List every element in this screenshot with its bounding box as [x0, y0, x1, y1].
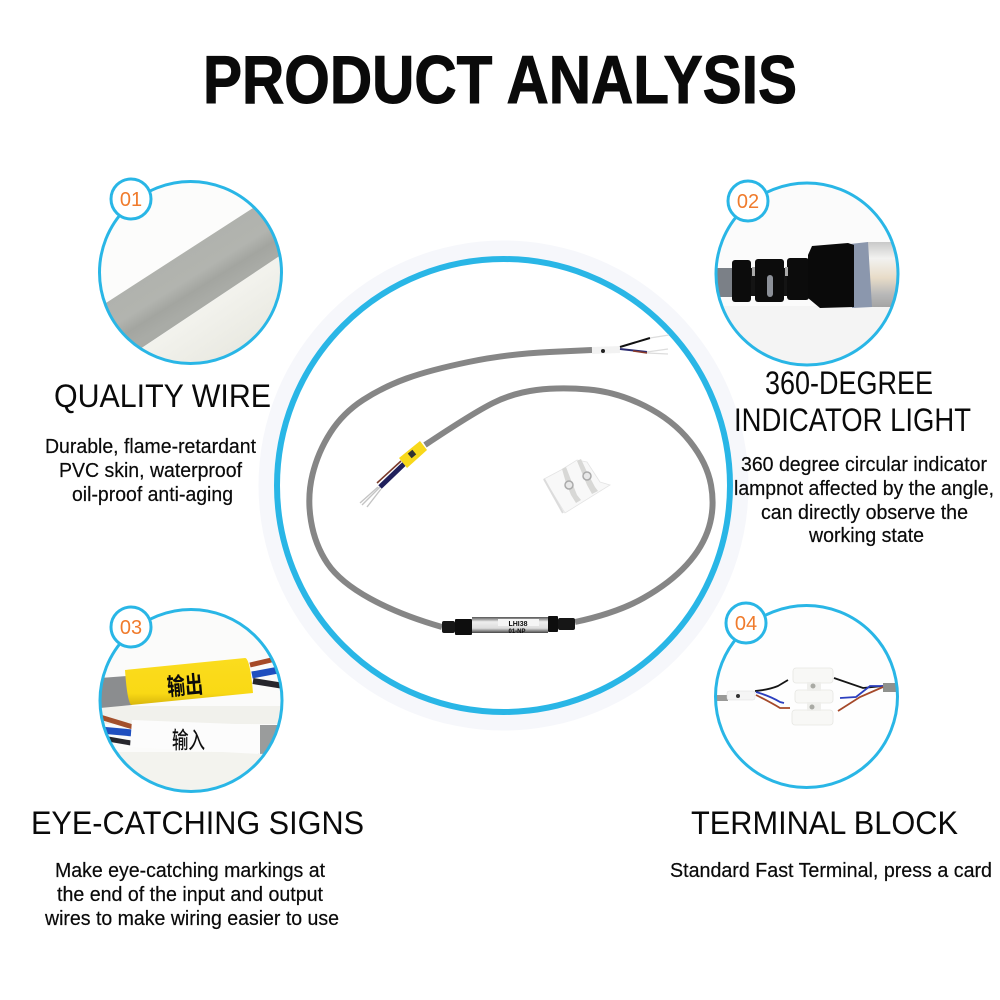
circle outline [716, 606, 898, 788]
heading: indicator light: 360-DEGREE [765, 365, 933, 401]
text: quality wire description: PVC skin, waterproof [59, 460, 242, 482]
heading: eye-catching signs: EYE-CATCHING SIGNS [31, 805, 364, 841]
panel: 02 indicator light [715, 181, 902, 368]
panel: central product photo [258, 240, 748, 730]
text: indicator light description: 360 degree circular indicator [741, 454, 987, 476]
text: indicator light description [734, 454, 994, 547]
inline connector: LHI38 [508, 621, 528, 628]
panel: 03 eye-catching signs [98, 607, 284, 794]
circle outline [716, 183, 898, 365]
photo: wired terminal block [717, 668, 896, 726]
photo: indicator light close-up [718, 242, 896, 364]
text: quality wire description: Durable, flame-retardant [45, 436, 256, 458]
text: eye-catching signs description [44, 860, 339, 930]
photo: labelled wires: 输出 [166, 671, 204, 702]
text: indicator light description: can directly observe the [761, 502, 968, 524]
text: indicator light description: lampnot affected by the angle, [734, 478, 994, 500]
number badge 02 [728, 181, 768, 221]
photo: labelled wires: 输入 [172, 727, 205, 753]
circle outline [100, 182, 282, 364]
number badge 04 [726, 603, 766, 643]
text: quality wire description: oil-proof anti-aging [72, 484, 233, 506]
number badge 01: 01 [120, 189, 142, 211]
photo: labelled wires [102, 658, 280, 790]
heading: quality wire: QUALITY WIRE [54, 378, 271, 414]
title: PRODUCT ANALYSIS [203, 42, 797, 118]
text: indicator light description: working state [808, 525, 924, 547]
input wire end [592, 335, 669, 354]
inline connector: 01-NP [508, 629, 526, 635]
panel: 04 terminal block [714, 603, 900, 790]
photo: wire close-up [106, 208, 280, 362]
central circle [277, 259, 730, 712]
inline connector [442, 616, 575, 635]
text: eye-catching signs description: the end of the input and output [57, 884, 323, 906]
heading: indicator light [734, 365, 971, 438]
number badge 03 [111, 607, 151, 647]
text: eye-catching signs description: Make eye-catching markings at [55, 860, 325, 882]
white terminal block [544, 459, 610, 513]
cable [309, 350, 713, 627]
text: eye-catching signs description: wires to make wiring easier to use [44, 908, 339, 930]
number badge 01 [111, 179, 151, 219]
panel: 01 quality wire [95, 179, 290, 376]
text: quality wire description [45, 436, 256, 506]
circle outline [100, 610, 282, 792]
output wire end with yellow label [360, 441, 427, 507]
number badge 02: 02 [737, 191, 759, 213]
number badge 04: 04 [735, 613, 757, 635]
central circle halo [258, 240, 748, 730]
text: terminal block description: Standard Fast Terminal, press a card [670, 860, 992, 882]
heading: terminal block: TERMINAL BLOCK [691, 805, 958, 841]
number badge 03: 03 [120, 617, 142, 639]
